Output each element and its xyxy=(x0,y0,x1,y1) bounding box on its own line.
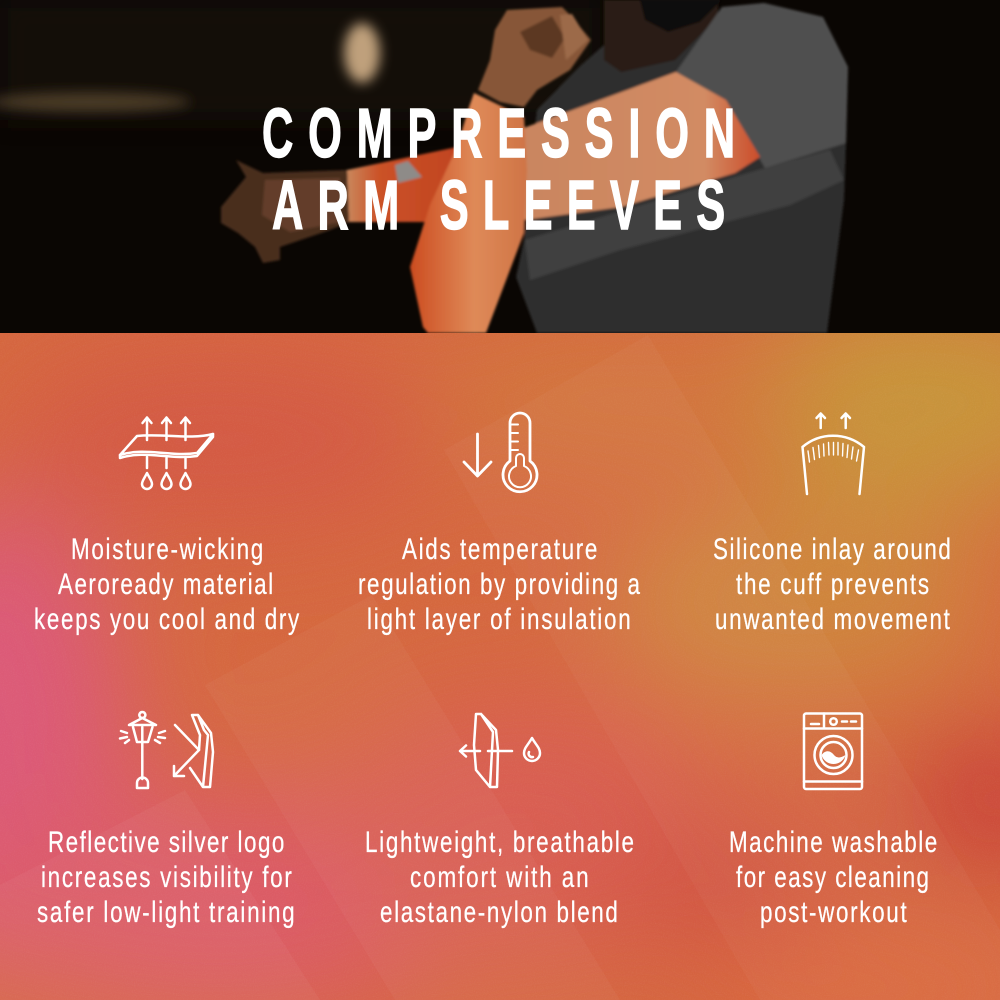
text: lightweight comfort: comfort with an xyxy=(410,860,589,894)
text: reflective logo: increases visibility for xyxy=(41,860,292,894)
upper arm xyxy=(510,72,760,222)
title: ARM SLEEVES xyxy=(272,166,725,245)
text: reflective logo: Reflective silver logo xyxy=(48,825,284,859)
text: silicone inlay: Silicone inlay around xyxy=(713,532,951,566)
text: moisture-wicking: keeps you cool and dry xyxy=(34,602,300,636)
shoulder sleeve xyxy=(676,3,848,168)
text: reflective logo: safer low-light training xyxy=(37,895,295,929)
text: temperature regulation: light layer of insulation xyxy=(367,602,631,636)
text: silicone inlay xyxy=(713,532,951,636)
neck xyxy=(604,0,718,72)
forearm sleeve xyxy=(345,146,454,224)
text: temperature regulation xyxy=(358,532,640,636)
vertical forearm xyxy=(410,93,527,333)
icon: washing machine xyxy=(804,714,862,789)
text: moisture-wicking xyxy=(34,532,300,636)
gradient background panel xyxy=(0,290,1000,1000)
text: silicone inlay: the cuff prevents xyxy=(736,567,929,601)
translucent facets xyxy=(444,335,1000,1000)
text: machine washable: post-workout xyxy=(760,895,907,929)
text: lightweight comfort: elastane-nylon blend xyxy=(380,895,618,929)
text: moisture-wicking: Moisture-wicking xyxy=(71,532,263,566)
text: machine washable: for easy cleaning xyxy=(736,860,929,894)
raised fist xyxy=(478,7,591,107)
extended hand xyxy=(221,160,349,263)
icon: silicone cuff with arrows xyxy=(802,414,864,494)
text: temperature regulation: regulation by providing a xyxy=(358,567,640,601)
text: machine washable: Machine washable xyxy=(729,825,937,859)
title xyxy=(262,94,735,245)
icon: thermometer with down arrow xyxy=(464,413,537,492)
icon: lightweight panel with arrow and drop xyxy=(460,714,540,787)
icon: street lamp and reflective panel xyxy=(120,712,213,788)
text: temperature regulation: Aids temperature xyxy=(402,532,597,566)
icon: moisture-wicking fabric xyxy=(120,418,213,489)
text: machine washable xyxy=(729,825,937,929)
title: COMPRESSION xyxy=(262,94,735,173)
text: lightweight comfort: Lightweight, breathable xyxy=(365,825,634,859)
torso shirt xyxy=(516,3,848,333)
photo: athlete stretching in arm sleeves xyxy=(0,0,850,333)
text: lightweight comfort xyxy=(365,825,634,929)
text: reflective logo xyxy=(37,825,295,929)
text: silicone inlay: unwanted movement xyxy=(715,602,950,636)
text: moisture-wicking: Aeroready material xyxy=(58,567,273,601)
